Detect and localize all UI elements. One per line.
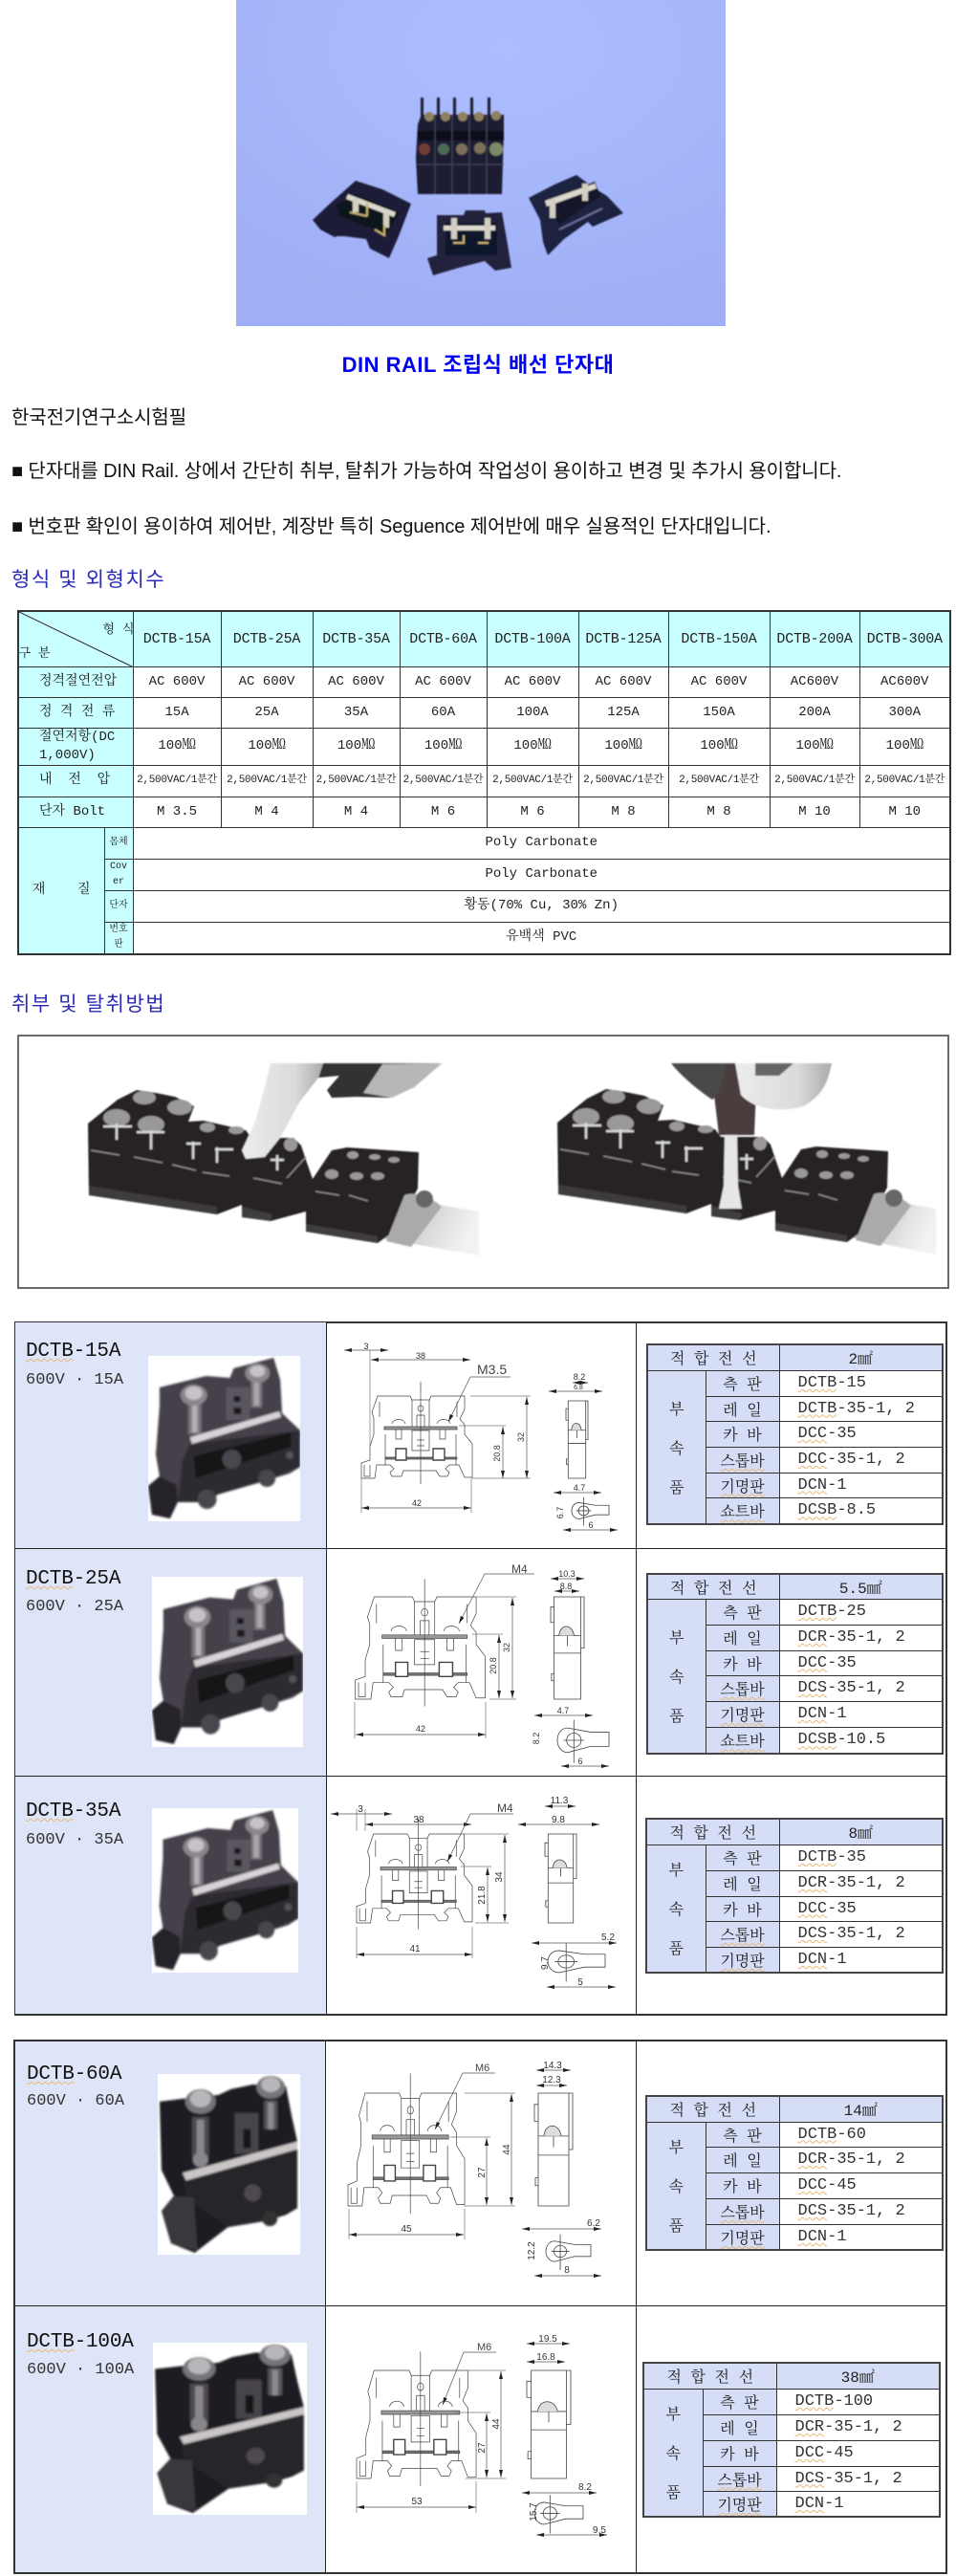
table: DCTB-15A accessories: 품	[669, 1480, 684, 1497]
row: withstand voltage: 2,500VAC/1분간	[403, 775, 483, 786]
drawing: DCTB-15A dimensions: 6	[588, 1520, 594, 1530]
table: DCTB-25A accessories: 품	[669, 1709, 684, 1726]
table: DCTB-15A accessories: 2㎟	[848, 1351, 873, 1368]
row: terminal bolt: M 10	[888, 803, 921, 819]
table: DCTB-100A accessories: DCN-1	[795, 2495, 844, 2513]
header row: DCTB-125A	[585, 631, 662, 647]
table: DCTB-100A accessories: DCS-35-1, 2	[795, 2469, 902, 2488]
model name: DCTB-100A	[27, 2331, 134, 2353]
table: DCTB-35A accessories: 품	[669, 1941, 684, 1958]
drawing: DCTB-60A dimensions: 44	[502, 2144, 512, 2155]
model name: DCTB-35A	[26, 1801, 120, 1823]
drawing: DCTB-60A dimensions: 27	[477, 2167, 488, 2178]
table: specifications	[17, 610, 951, 954]
drawing: DCTB-25A dimensions: M4	[511, 1562, 528, 1576]
header row: DCTB-25A	[233, 631, 300, 647]
drawing: DCTB-25A dimensions: 32	[502, 1643, 511, 1652]
photo: DCTB-35A	[152, 1808, 298, 1973]
model name: DCTB-60A	[27, 2063, 121, 2085]
drawing: DCTB-35A dimensions: 9.7	[540, 1956, 551, 1970]
header row: DCTB-100A	[494, 631, 571, 647]
table: DCTB-60A accessories: 측 판	[723, 2128, 762, 2146]
model name: DCTB-25A	[26, 1568, 120, 1590]
drawing: DCTB-15A dimensions: M3.5	[477, 1362, 507, 1377]
row: rated current: 25A	[254, 704, 279, 719]
table: DCTB-100A accessories: 품	[666, 2485, 681, 2502]
drawing: DCTB-25A dimensions: 20.8	[489, 1657, 498, 1674]
separator	[636, 1549, 637, 1776]
drawing: DCTB-100A dimensions: 8.2	[578, 2482, 592, 2493]
rating: 600V · 25A	[26, 1598, 123, 1616]
row: rated current: 150A	[703, 704, 735, 719]
product row: DCTB-60A	[13, 2040, 947, 2306]
row: withstand voltage: 2,500VAC/1분간	[227, 775, 307, 786]
product row: DCTB-15A	[14, 1321, 947, 1549]
drawing: DCTB-100A dimensions: 53	[411, 2497, 423, 2507]
table: DCTB-100A accessories: DCR-35-1, 2	[795, 2418, 902, 2436]
drawing: DCTB-60A dimensions: 12.3	[542, 2075, 561, 2085]
photo: finger pressing terminal	[88, 1063, 479, 1255]
separator	[636, 1777, 637, 2014]
separator	[636, 1321, 637, 1548]
drawing: DCTB-60A dimensions: 45	[401, 2224, 412, 2235]
row: rated current: 125A	[607, 704, 640, 719]
rating: 600V · 35A	[26, 1831, 123, 1849]
table: DCTB-15A accessories: 부	[669, 1402, 684, 1419]
drawing: DCTB-35A dimensions	[331, 1796, 617, 1989]
drawing: DCTB-100A dimensions: 44	[491, 2418, 502, 2430]
drawing: DCTB-60A dimensions: 6.2	[587, 2218, 600, 2229]
row: insulation resistance: 100㏁	[604, 738, 642, 753]
table: DCTB-100A accessories: 적 합 전 선	[666, 2369, 753, 2387]
table: DCTB-15A accessories: 레 일	[723, 1402, 762, 1419]
drawing: DCTB-100A dimensions	[356, 2334, 607, 2537]
table: DCTB-60A accessories: DCS-35-1, 2	[798, 2202, 905, 2220]
row: insulation resistance: 1,000V)	[39, 748, 96, 763]
row: rated current: 300A	[888, 704, 921, 719]
left panel: DCTB-15A	[15, 1322, 327, 1548]
drawing: DCTB-35A dimensions: 21.8	[477, 1886, 488, 1905]
row: rated current: 200A	[798, 704, 831, 719]
table: DCTB-100A accessories: 속	[666, 2446, 681, 2463]
table: DCTB-35A accessories: DCR-35-1, 2	[798, 1874, 905, 1892]
row: withstand voltage	[19, 766, 945, 797]
row: insulation resistance: 100㏁	[700, 738, 738, 753]
drawing: DCTB-25A dimensions: 4.7	[557, 1706, 569, 1715]
row: rated insulation voltage: AC600V	[791, 673, 838, 688]
table: DCTB-35A accessories: DCN-1	[798, 1951, 847, 1969]
model name: DCTB-15A	[26, 1341, 120, 1363]
row: rated current: 60A	[431, 704, 455, 719]
drawing: DCTB-35A dimensions: 41	[409, 1944, 421, 1954]
row: withstand voltage: 2,500VAC/1분간	[583, 775, 663, 786]
row: rated insulation voltage: AC 600V	[691, 673, 747, 688]
left panel: DCTB-60A	[15, 2041, 326, 2305]
table: DCTB-35A accessories	[645, 1818, 944, 1974]
table: DCTB-25A accessories: 5.5㎟	[839, 1581, 882, 1598]
row: terminal bolt: M 4	[254, 803, 279, 819]
drawing: DCTB-15A dimensions: 20.8	[492, 1445, 502, 1462]
row: rated insulation voltage: AC 600V	[328, 673, 384, 688]
text: feature 2: ■ 번호판 확인이 용이하여 제어반, 계장반 특히 Seguence 제어반에 매우 실용적인 단자대입니다.	[11, 516, 771, 537]
table: DCTB-25A accessories: 적 합 전 선	[670, 1581, 757, 1598]
row: insulation resistance: 100㏁	[337, 738, 375, 753]
table: DCTB-15A accessories: DCSB-8.5	[798, 1501, 876, 1519]
photo: DCTB-60A	[158, 2074, 300, 2255]
table: DCTB-25A accessories: DCN-1	[798, 1705, 847, 1723]
product photo: terminal blocks on blue background	[236, 0, 726, 326]
row: rated current: 정 격 전 류	[39, 704, 115, 719]
drawing: DCTB-25A dimensions: 42	[416, 1724, 425, 1734]
photo: DCTB-25A	[152, 1577, 303, 1747]
row: insulation resistance: 100㏁	[886, 738, 923, 753]
header row: DCTB-15A	[143, 631, 210, 647]
row: withstand voltage: 2,500VAC/1분간	[137, 775, 217, 786]
row: material terminal: 단자	[109, 901, 128, 910]
table: DCTB-60A accessories: 레 일	[723, 2153, 762, 2171]
table: DCTB-100A accessories: DCTB-100	[795, 2392, 873, 2411]
row: insulation resistance	[19, 729, 923, 765]
drawing: DCTB-25A dimensions	[354, 1562, 610, 1768]
table: DCTB-35A accessories: 부	[669, 1863, 684, 1880]
drawing: DCTB-25A dimensions: 8.2	[532, 1733, 541, 1744]
row: material cover: er	[113, 876, 124, 887]
drawing: DCTB-25A dimensions: 10.3	[558, 1569, 576, 1579]
drawing: DCTB-35A dimensions: M4	[497, 1801, 513, 1815]
table: DCTB-60A accessories	[645, 2095, 944, 2251]
row: material number plate	[105, 923, 576, 953]
row: insulation resistance: 절연저항(DC	[39, 729, 115, 744]
row: rated insulation voltage: 정격절연전압	[39, 673, 117, 688]
row: withstand voltage: 2,500VAC/1분간	[492, 775, 573, 786]
table: DCTB-25A accessories: 레 일	[723, 1631, 762, 1648]
row: terminal bolt: M 10	[798, 803, 831, 819]
drawing: DCTB-15A dimensions: 32	[516, 1432, 526, 1442]
table: DCTB-60A accessories: 14㎟	[844, 2103, 878, 2120]
drawing: DCTB-100A dimensions: 27	[477, 2442, 488, 2454]
product row: DCTB-100A	[13, 2306, 947, 2574]
table: DCTB-25A accessories	[646, 1573, 944, 1755]
drawing: DCTB-35A dimensions: 11.3	[551, 1796, 569, 1806]
drawing: DCTB-35A dimensions: 5.2	[601, 1932, 615, 1943]
table: DCTB-60A accessories: DCTB-60	[798, 2125, 866, 2144]
drawing: DCTB-35A dimensions: 3	[358, 1804, 363, 1815]
table: DCTB-60A accessories: 기명판	[720, 2231, 765, 2248]
drawing: DCTB-60A dimensions: 12.2	[527, 2241, 537, 2260]
table: DCTB-35A accessories: DCC-35	[798, 1899, 857, 1918]
drawing: DCTB-60A dimensions: M6	[475, 2063, 489, 2074]
row: insulation resistance: 100㏁	[424, 738, 462, 753]
header row	[19, 612, 949, 953]
table: DCTB-25A accessories: DCSB-10.5	[798, 1731, 885, 1749]
table: DCTB-60A accessories: DCN-1	[798, 2228, 847, 2246]
left panel: DCTB-25A	[15, 1549, 327, 1776]
table: DCTB-25A accessories: 측 판	[723, 1605, 762, 1623]
table: DCTB-35A accessories: 레 일	[723, 1877, 762, 1894]
drawing: DCTB-15A dimensions: 6.7	[555, 1507, 565, 1518]
drawing: DCTB-15A dimensions: 6.8	[574, 1385, 583, 1391]
table: DCTB-100A accessories: DCC-45	[795, 2444, 854, 2462]
drawing: DCTB-25A dimensions: 6	[577, 1757, 583, 1766]
table: DCTB-60A accessories: DCC-45	[798, 2176, 857, 2194]
row: material number plate: 유백색 PVC	[506, 929, 576, 945]
row: rated current: 100A	[516, 704, 549, 719]
table: DCTB-35A accessories: 기명판	[720, 1954, 765, 1971]
drawing: DCTB-100A dimensions: 9.5	[593, 2525, 606, 2536]
drawing: DCTB-60A dimensions: 8	[564, 2265, 570, 2276]
row: rated current: 35A	[344, 704, 368, 719]
table: DCTB-25A accessories: 카 바	[723, 1656, 762, 1673]
drawing: DCTB-60A dimensions	[348, 2061, 601, 2278]
row: rated insulation voltage	[19, 667, 929, 697]
drawing: DCTB-15A dimensions: 38	[416, 1351, 425, 1361]
row: terminal bolt: M 6	[520, 803, 545, 819]
row: rated insulation voltage: AC600V	[880, 673, 928, 688]
row: terminal bolt: M 8	[611, 803, 636, 819]
rating: 600V · 100A	[27, 2361, 134, 2379]
photo: DCTB-100A	[153, 2343, 307, 2515]
separator	[636, 2040, 637, 2305]
drawing: DCTB-60A dimensions: 14.3	[543, 2061, 562, 2071]
table: DCTB-100A accessories: 기명판	[717, 2498, 762, 2515]
table: DCTB-15A accessories: 측 판	[723, 1377, 762, 1394]
rating: 600V · 60A	[27, 2092, 124, 2110]
drawing: DCTB-15A dimensions: 8.2	[574, 1372, 585, 1382]
table: DCTB-15A accessories: 기명판	[720, 1478, 765, 1495]
drawing: DCTB-100A dimensions: 15.7	[529, 2502, 539, 2521]
table: DCTB-15A accessories: DCTB-35-1, 2	[798, 1400, 915, 1417]
table: DCTB-60A accessories: 품	[669, 2218, 684, 2236]
table: DCTB-100A accessories: 측 판	[720, 2395, 759, 2412]
photo: DCTB-15A	[148, 1356, 300, 1521]
table: DCTB-25A accessories: 쇼트바	[720, 1734, 765, 1751]
header row: 재 질	[33, 882, 91, 897]
row: rated insulation voltage: AC 600V	[596, 673, 651, 688]
left panel: DCTB-35A	[15, 1777, 327, 2014]
row: insulation resistance: 100㏁	[513, 738, 552, 753]
left panel: DCTB-100A	[15, 2306, 326, 2572]
header row: DCTB-200A	[776, 631, 853, 647]
table: DCTB-15A accessories: 카 바	[723, 1428, 762, 1445]
row: withstand voltage: 2,500VAC/1분간	[774, 775, 855, 786]
table: DCTB-60A accessories: 부	[669, 2140, 684, 2157]
row: terminal bolt: M 3.5	[157, 803, 197, 819]
row: rated insulation voltage: AC 600V	[149, 673, 205, 688]
table: DCTB-35A accessories: 8㎟	[848, 1825, 873, 1843]
row: withstand voltage: 2,500VAC/1분간	[679, 775, 759, 786]
row: material cover: Cov	[110, 861, 127, 872]
table: DCTB-100A accessories: 카 바	[720, 2447, 759, 2464]
table: DCTB-25A accessories: 스톱바	[720, 1682, 765, 1699]
row: terminal bolt: M 4	[344, 803, 368, 819]
row: terminal bolt: M 8	[706, 803, 731, 819]
table: DCTB-100A accessories: 레 일	[720, 2421, 759, 2438]
table: DCTB-15A accessories: DCC-35-1, 2	[798, 1451, 905, 1469]
header row: DCTB-35A	[322, 631, 390, 647]
table: DCTB-25A accessories: DCS-35-1, 2	[798, 1679, 905, 1697]
header row: 구 분	[19, 646, 51, 661]
header row: DCTB-60A	[409, 631, 477, 647]
title: DIN RAIL 조립식 배선 단자대	[342, 353, 614, 377]
row: rated insulation voltage: AC 600V	[415, 673, 471, 688]
drawing: DCTB-100A dimensions: 19.5	[538, 2334, 557, 2345]
table: DCTB-25A accessories: DCR-35-1, 2	[798, 1628, 905, 1647]
row: withstand voltage: 2,500VAC/1분간	[864, 775, 945, 786]
product row: DCTB-25A	[14, 1549, 947, 1777]
table: DCTB-60A accessories: 카 바	[723, 2179, 762, 2196]
drawing: DCTB-15A dimensions	[344, 1342, 618, 1532]
table: DCTB-15A accessories	[646, 1343, 944, 1525]
row: rated insulation voltage: AC 600V	[239, 673, 294, 688]
table: DCTB-60A accessories: 스톱바	[720, 2205, 765, 2222]
heading: type and dimensions: 형식 및 외형치수	[11, 569, 165, 591]
table: DCTB-25A accessories: DCTB-25	[798, 1603, 866, 1621]
row: terminal bolt	[19, 797, 921, 827]
row: withstand voltage: 2,500VAC/1분간	[316, 775, 396, 786]
rating: 600V · 15A	[26, 1371, 123, 1389]
row: withstand voltage: 내 전 압	[39, 773, 110, 788]
panel: mounting and removal photos	[17, 1035, 949, 1289]
row: terminal bolt: M 6	[431, 803, 455, 819]
table: DCTB-100A accessories	[642, 2362, 941, 2518]
drawing: DCTB-100A dimensions: 16.8	[536, 2352, 555, 2363]
header row: DCTB-150A	[681, 631, 757, 647]
row: material body: Poly Carbonate	[485, 835, 598, 850]
drawing: DCTB-15A dimensions: 4.7	[574, 1483, 585, 1493]
text: feature 1: ■ 단자대를 DIN Rail. 상에서 간단히 취부, 탈취가 가능하여 작업성이 용이하고 변경 및 추가시 용이합니다.	[11, 461, 841, 482]
header row: DCTB-300A	[867, 631, 943, 647]
table: DCTB-35A accessories: 카 바	[723, 1903, 762, 1920]
separator	[636, 2306, 637, 2572]
drawing: DCTB-15A dimensions: 3	[363, 1342, 369, 1351]
table: DCTB-35A accessories: 스톱바	[720, 1928, 765, 1945]
row: rated current: 15A	[164, 704, 189, 719]
row: rated insulation voltage: AC 600V	[505, 673, 560, 688]
table: DCTB-25A accessories: DCC-35	[798, 1654, 857, 1671]
table: DCTB-100A accessories: 38㎟	[841, 2369, 875, 2387]
row: rated current	[19, 698, 921, 728]
table: DCTB-25A accessories: 부	[669, 1630, 684, 1648]
table: DCTB-25A accessories: 속	[669, 1670, 684, 1687]
row: insulation resistance: 100㏁	[158, 738, 196, 753]
row: material number plate: 번호	[109, 924, 128, 935]
row: material body: 몸체	[109, 838, 128, 847]
table: DCTB-35A accessories: DCS-35-1, 2	[798, 1925, 905, 1943]
row: material cover: Poly Carbonate	[485, 866, 598, 882]
table: DCTB-15A accessories: 쇼트바	[720, 1504, 765, 1521]
table: DCTB-35A accessories: 적 합 전 선	[669, 1825, 756, 1843]
photo: screwdriver removing terminal	[557, 1063, 936, 1255]
product row: DCTB-35A	[14, 1777, 947, 2016]
row: material body	[19, 828, 598, 953]
drawing: DCTB-35A dimensions: 34	[494, 1871, 505, 1883]
table: DCTB-15A accessories: 스톱바	[720, 1453, 765, 1471]
row: material number plate: 판	[114, 939, 123, 950]
row: material terminal: 황동(70% Cu, 30% Zn)	[465, 898, 619, 913]
text: certification: 한국전기연구소시험필	[11, 407, 186, 428]
row: material terminal	[105, 891, 619, 922]
drawing: DCTB-35A dimensions: 5	[577, 1977, 583, 1988]
drawing: DCTB-35A dimensions: 9.8	[552, 1815, 565, 1825]
drawing: DCTB-35A dimensions: 38	[413, 1815, 424, 1825]
drawing: DCTB-100A dimensions: M6	[477, 2342, 491, 2353]
table: DCTB-15A accessories: DCN-1	[798, 1476, 847, 1494]
drawing: DCTB-15A dimensions: 42	[412, 1498, 422, 1508]
table: DCTB-35A accessories: 측 판	[723, 1851, 762, 1868]
table: DCTB-15A accessories: DCC-35	[798, 1425, 857, 1443]
table: DCTB-100A accessories: 스톱바	[717, 2473, 762, 2490]
table: DCTB-35A accessories: DCTB-35	[798, 1848, 866, 1867]
table: DCTB-15A accessories: 적 합 전 선	[670, 1351, 757, 1368]
table: DCTB-60A accessories: 적 합 전 선	[669, 2103, 756, 2120]
row: terminal bolt: 단자 Bolt	[39, 803, 105, 819]
table: DCTB-60A accessories: 속	[669, 2179, 684, 2196]
table: DCTB-100A accessories: 부	[666, 2407, 681, 2424]
table: DCTB-60A accessories: DCR-35-1, 2	[798, 2150, 905, 2169]
row: insulation resistance: 100㏁	[795, 738, 834, 753]
table: DCTB-35A accessories: 속	[669, 1902, 684, 1919]
row: material cover	[105, 860, 598, 890]
drawing: DCTB-25A dimensions: 8.8	[560, 1582, 572, 1591]
table: DCTB-15A accessories: DCTB-15	[798, 1374, 866, 1392]
heading: mounting and removal: 취부 및 탈취방법	[11, 993, 165, 1015]
table: DCTB-25A accessories: 기명판	[720, 1708, 765, 1725]
row: insulation resistance: 100㏁	[248, 738, 286, 753]
table: DCTB-15A accessories: 속	[669, 1441, 684, 1458]
